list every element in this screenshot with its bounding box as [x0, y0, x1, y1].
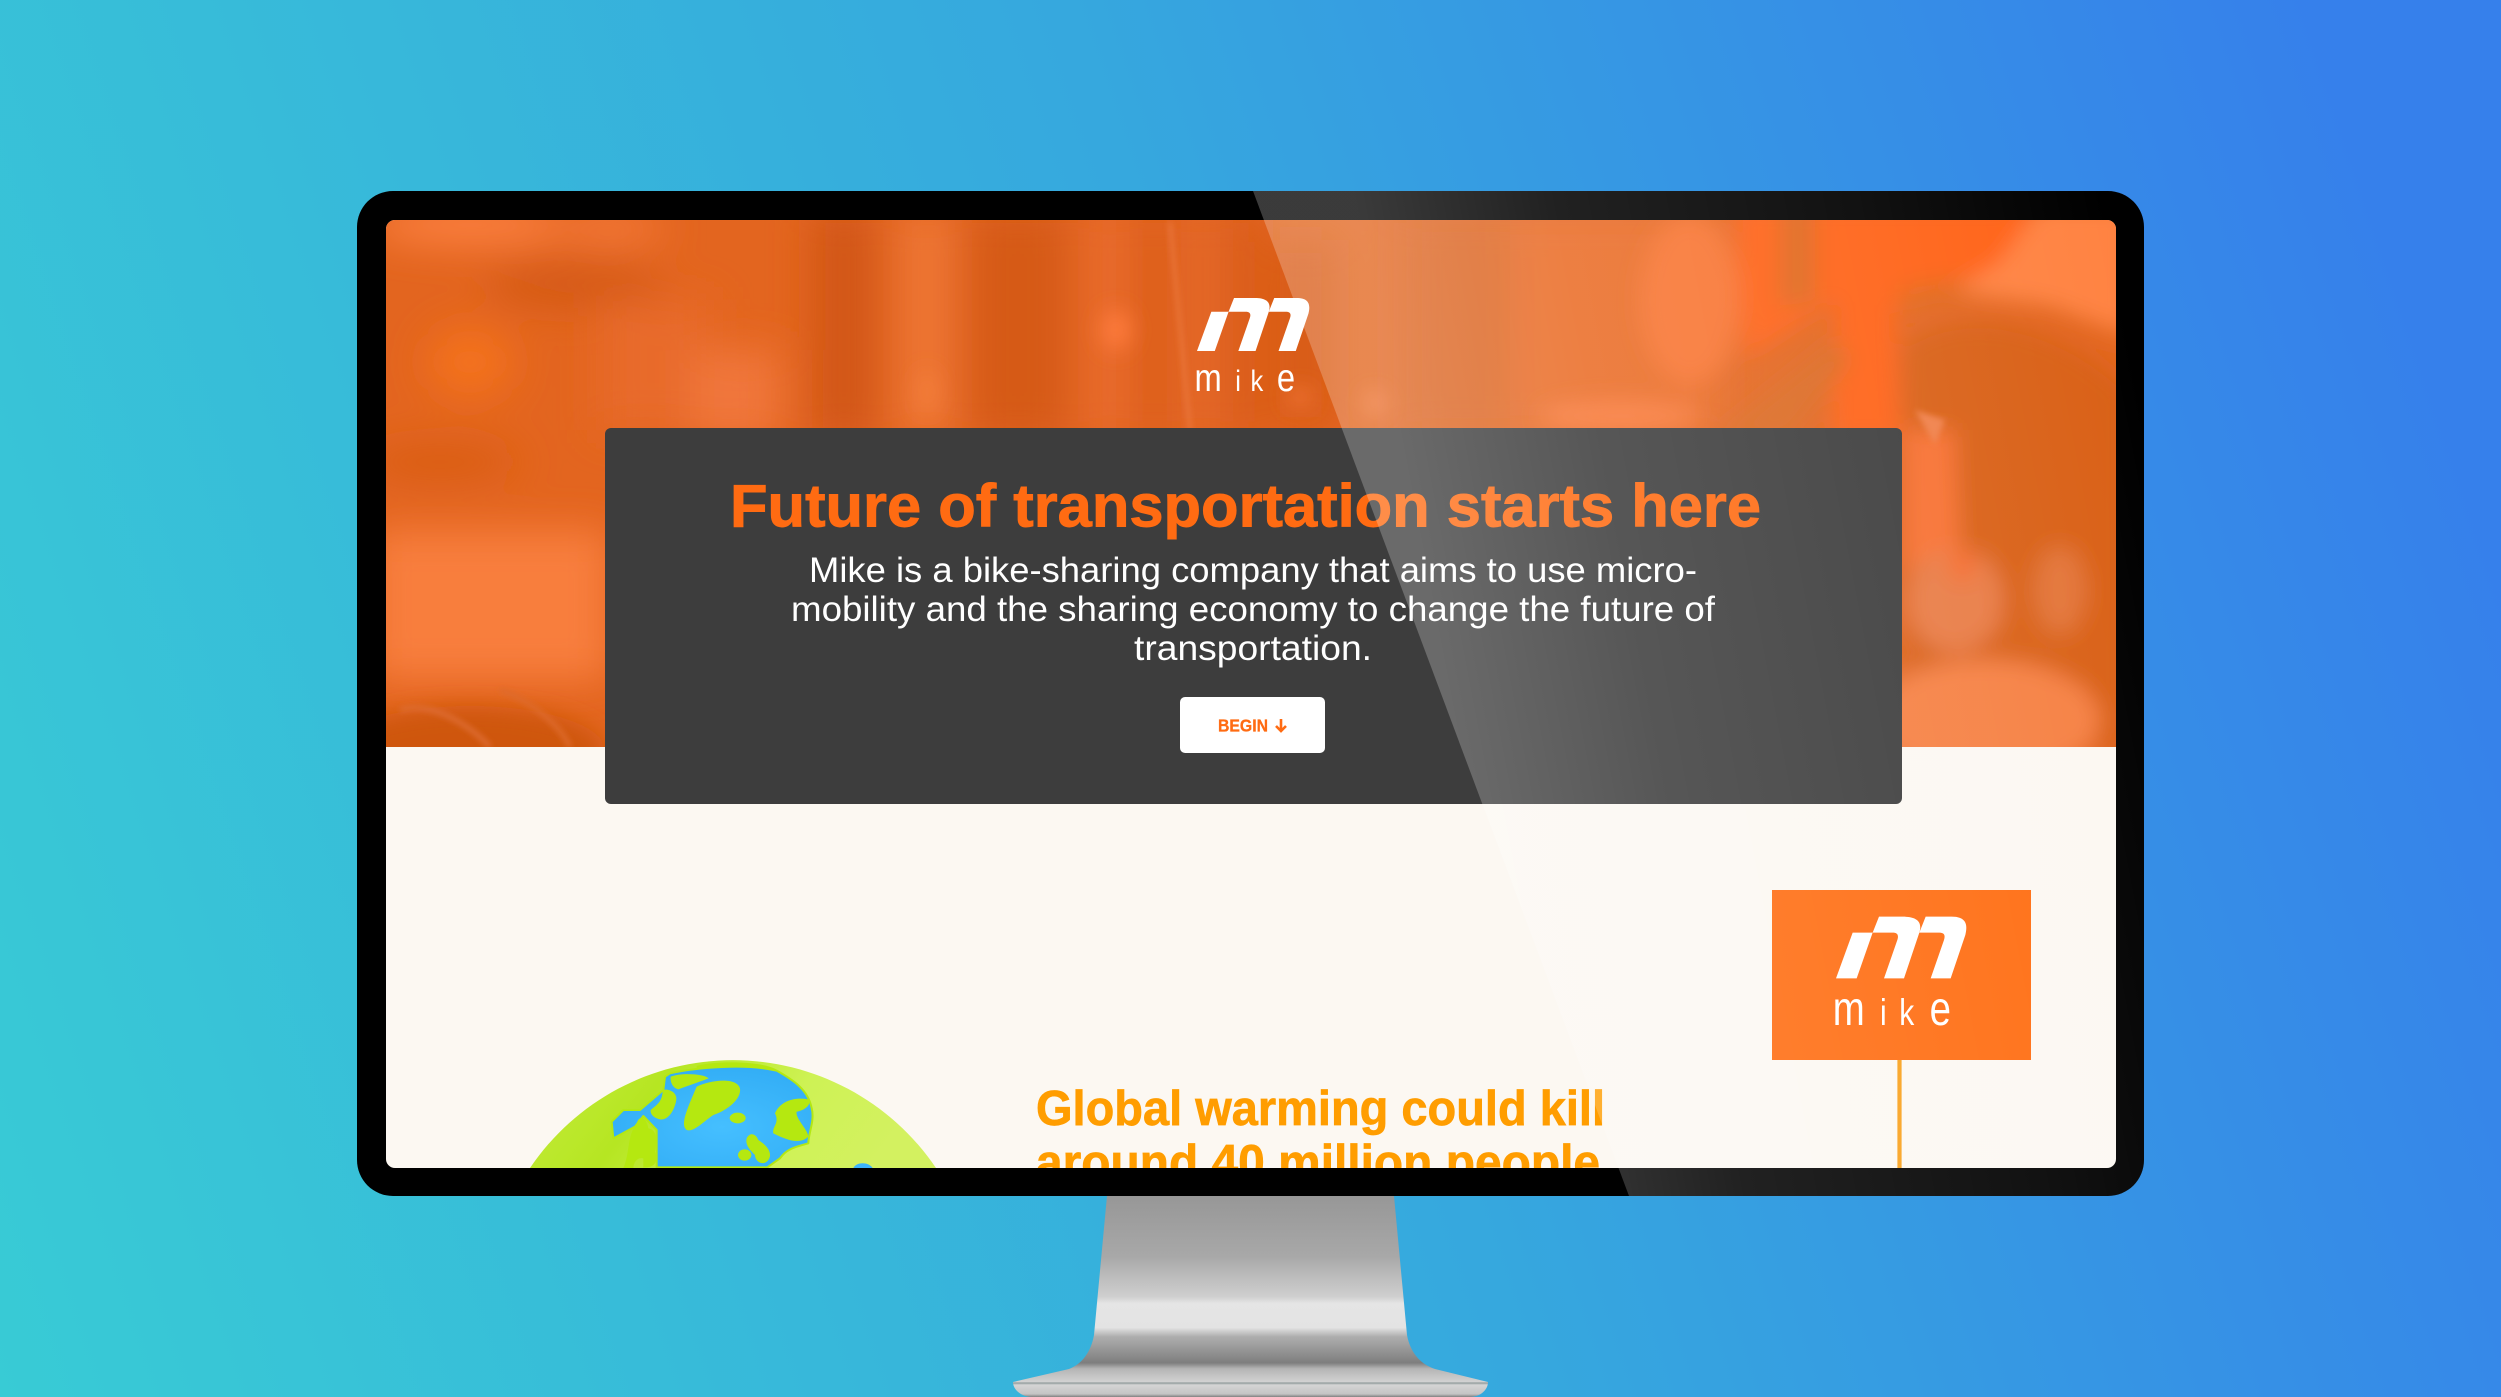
logo wordmark: i	[1235, 364, 1241, 397]
globe small sea patch	[853, 1163, 873, 1168]
sign wordmark: i	[1880, 992, 1887, 1034]
headline: global warming: around 40 million people	[1036, 1136, 1600, 1190]
sign wordmark: m	[1833, 983, 1865, 1036]
hero dark panel	[605, 428, 1902, 804]
pole	[1897, 1060, 1902, 1168]
screen cream page background	[386, 220, 2116, 1168]
globe continents	[623, 1062, 809, 1168]
logo mark	[1197, 298, 1309, 351]
sign logo mark	[1836, 917, 1966, 978]
monitor stand	[1013, 1196, 1488, 1397]
glass reflection overlay	[1253, 191, 2150, 1196]
headline: global warming	[1038, 1089, 1602, 1168]
globe ocean	[612, 1067, 813, 1167]
description text	[791, 551, 1715, 668]
begin button: BEGIN	[1218, 716, 1268, 736]
icon: down arrow	[1276, 719, 1286, 731]
description text: transportation.	[1134, 629, 1372, 668]
logo wordmark: k	[1251, 364, 1263, 397]
begin button	[1180, 697, 1325, 753]
screen	[335, 205, 2130, 1190]
sign board	[1772, 890, 2031, 1060]
description text: Mike is a bike-sharing company that aims to use micro-	[809, 551, 1697, 590]
logo wordmark: e	[1277, 357, 1295, 400]
monitor frame	[357, 191, 2144, 1196]
description text: mobility and the sharing economy to change the future of	[791, 590, 1715, 629]
sign wordmark: k	[1899, 992, 1915, 1034]
hero logo: mike mark	[1194, 298, 1309, 400]
logo wordmark: m	[1194, 357, 1222, 400]
orange sign with pole	[1772, 890, 2031, 1168]
headline: global warming: Global warming could kill	[1036, 1082, 1605, 1136]
globe illustration	[530, 1060, 936, 1168]
hero photo with orange duotone	[386, 220, 2116, 747]
sign wordmark: e	[1930, 983, 1951, 1036]
title: Future of transportation starts here	[730, 472, 1761, 540]
